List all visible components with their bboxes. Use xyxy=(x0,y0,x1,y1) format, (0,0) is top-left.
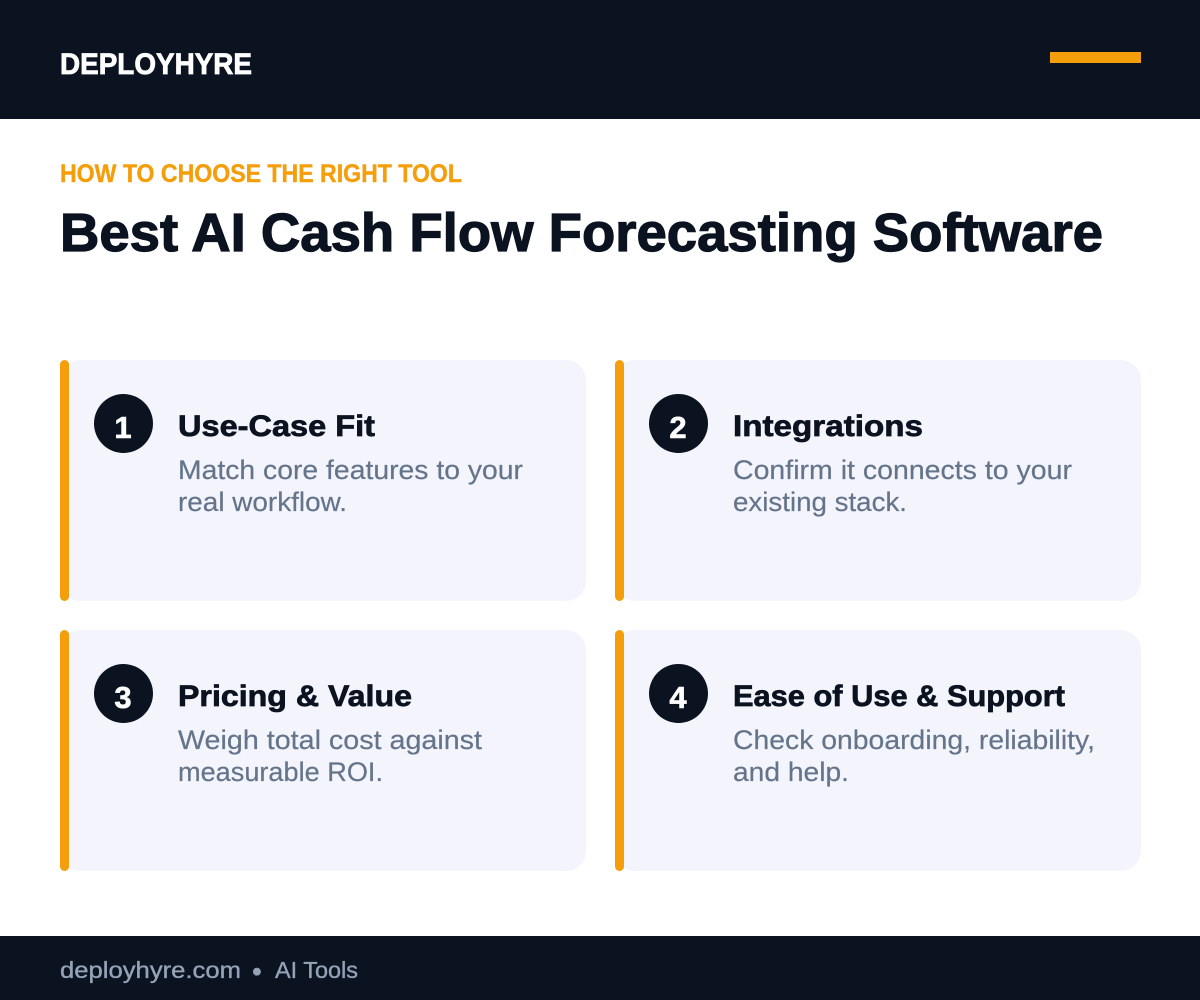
card heading: Use-Case Fit xyxy=(178,410,375,443)
card description: measurable ROI. xyxy=(178,757,383,787)
number badge 4 xyxy=(649,664,708,723)
footer text: deployhyre.com xyxy=(60,957,241,983)
header band xyxy=(0,0,1200,119)
card description: existing stack. xyxy=(733,487,907,517)
number badge 1: 1 xyxy=(114,410,132,445)
card description: Weigh total cost against xyxy=(178,725,483,755)
panel: use-case fit xyxy=(60,360,586,601)
panel: integrations xyxy=(615,360,1141,601)
number badge 2 xyxy=(649,394,708,453)
number badge 2: 2 xyxy=(669,410,687,445)
footer text: AI Tools xyxy=(275,957,358,983)
number badge 3: 3 xyxy=(114,680,132,715)
card heading: Pricing & Value xyxy=(178,680,412,713)
number badge 3 xyxy=(94,664,153,723)
number badge 1 xyxy=(94,394,153,453)
card description: Confirm it connects to your xyxy=(733,455,1072,485)
number badge 4: 4 xyxy=(669,680,687,715)
card heading: Ease of Use & Support xyxy=(733,680,1065,713)
panel: pricing and value xyxy=(60,630,586,871)
footer text: • xyxy=(252,956,262,987)
footer band xyxy=(0,936,1200,1000)
eyebrow heading: HOW TO CHOOSE THE RIGHT TOOL xyxy=(60,160,462,188)
panel: ease of use and support xyxy=(615,630,1141,871)
card description: real workflow. xyxy=(178,487,347,517)
accent bar xyxy=(1050,52,1141,63)
card description: Check onboarding, reliability, xyxy=(733,725,1095,755)
card heading: Integrations xyxy=(733,410,923,443)
title: Best AI Cash Flow Forecasting Software xyxy=(60,203,1103,263)
card description: Match core features to your xyxy=(178,455,523,485)
logo wordmark: DEPLOYHYRE xyxy=(60,48,252,81)
card description: and help. xyxy=(733,757,849,787)
